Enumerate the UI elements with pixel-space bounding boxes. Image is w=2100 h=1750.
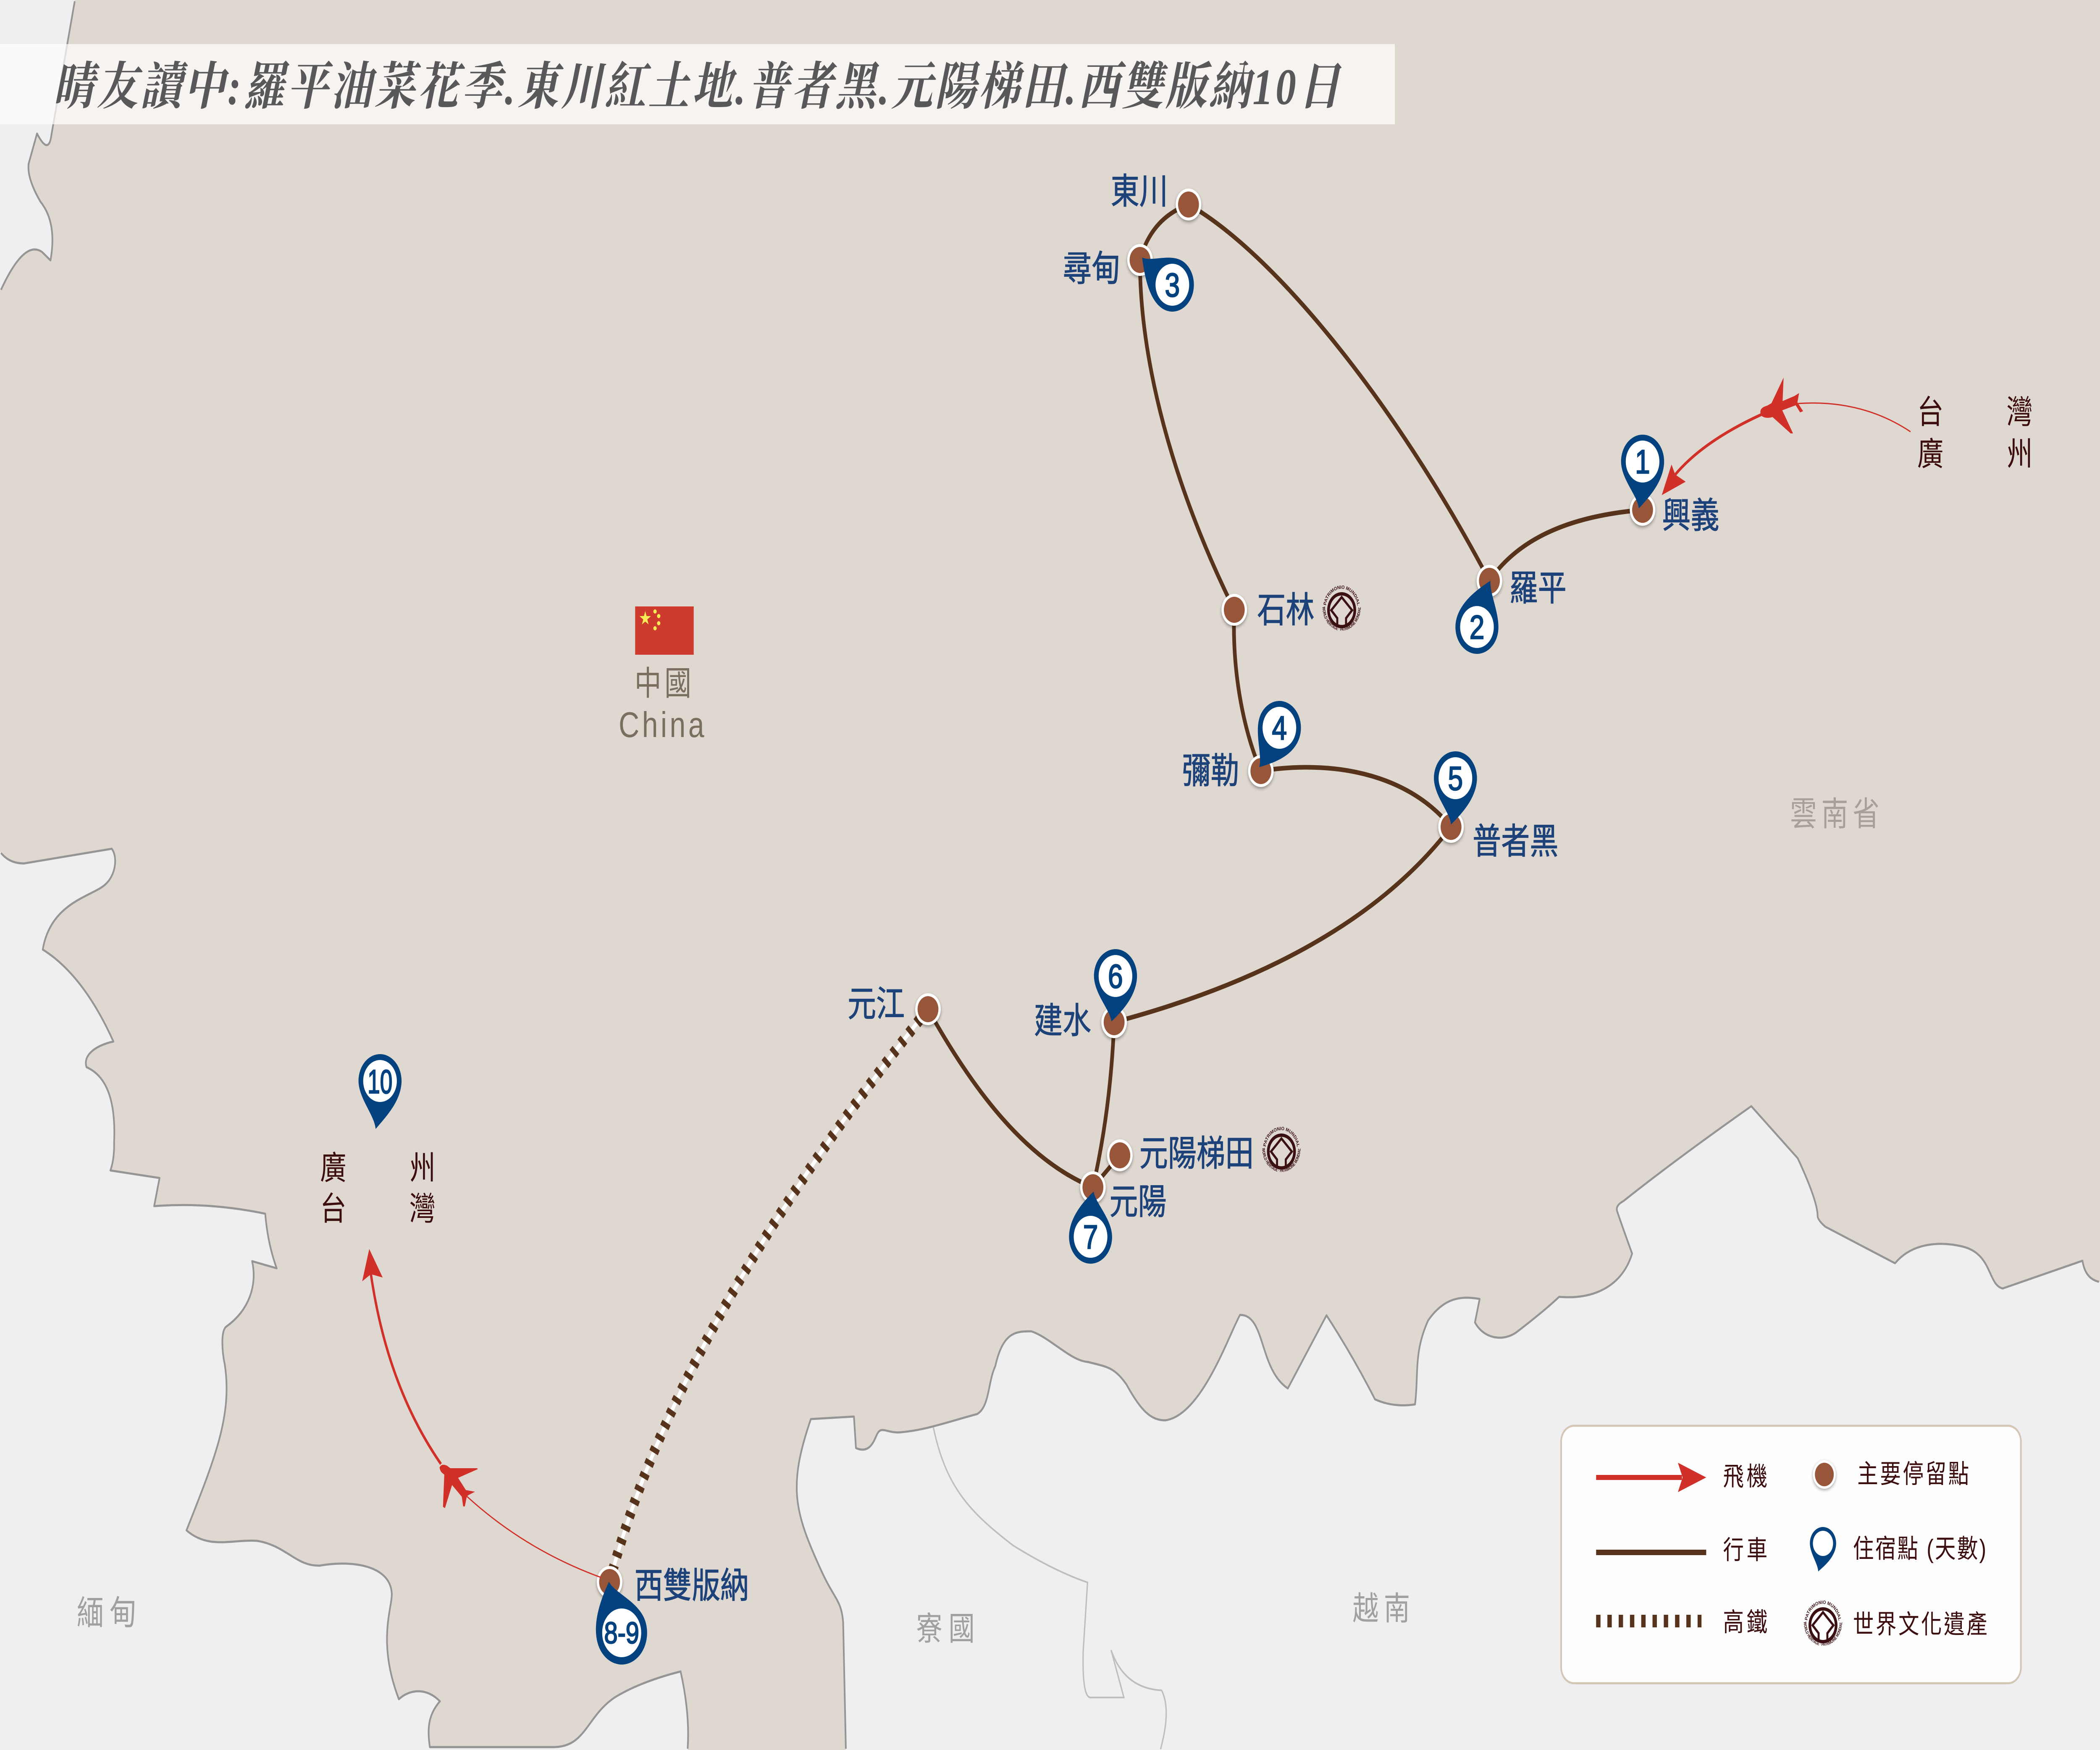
arrowhead — [1662, 464, 1685, 495]
icon: airplane — [1760, 378, 1803, 433]
legend label: main stop: 主要停留點 — [1857, 1459, 1971, 1488]
stop: Dongchuan — [1176, 189, 1201, 222]
stop: Yuanyang terraces — [1107, 1139, 1133, 1173]
gateway labels right — [1917, 394, 2033, 472]
icon: world heritage, Shilin: · PATRIMONIO MUNDIAL · — [1323, 585, 1360, 609]
pin: day 4: 4 — [1272, 709, 1287, 747]
label: Dongchuan: 東川 — [1111, 172, 1168, 212]
legend label: flight: 飛機 — [1723, 1462, 1770, 1491]
label: Jianshui: 建水 — [1034, 1001, 1091, 1041]
flag of China — [635, 606, 694, 655]
pin: day 10: 10 — [368, 1063, 392, 1101]
flight route out: Xishuangbanna to Guangzhou — [362, 1249, 601, 1577]
label: China in English: China — [619, 705, 707, 745]
pin: day 8-9 — [585, 1572, 654, 1673]
pin: day 6 — [1090, 946, 1139, 1024]
stop: Yuanyang — [1080, 1171, 1106, 1205]
pin: day 3: 3 — [1165, 266, 1180, 304]
stop: Yuanjiang — [915, 993, 941, 1027]
high-speed rail route — [609, 1009, 928, 1582]
label: Guangzhou: 廣州 — [320, 1149, 436, 1186]
pin: day 2: 2 — [1470, 609, 1484, 646]
stop labels — [635, 172, 1719, 1606]
icon: world heritage, Shilin: WORLD HERITAGE · PATRIMOINE MONDIAL — [1321, 606, 1362, 632]
icon: world heritage, Yuanyang terraces — [1261, 1126, 1302, 1173]
label: Xundian: 尋甸 — [1063, 249, 1120, 289]
arrowhead — [362, 1249, 383, 1281]
label: Xingyi: 興義 — [1662, 496, 1719, 536]
legend icon: world heritage: WORLD HERITAGE · PATRIMOINE MONDIAL — [1803, 1621, 1843, 1647]
pin: day 5: 5 — [1448, 760, 1463, 798]
legend icon: world heritage: · PATRIMONIO MUNDIAL · — [1804, 1600, 1842, 1624]
stop markers — [597, 189, 1655, 1600]
overnight pins — [354, 236, 1666, 1673]
legend: flight arrow — [1596, 1463, 1706, 1492]
flight path thick section — [371, 1274, 441, 1464]
label: Yuanjiang: 元江 — [848, 984, 905, 1024]
country label: Myanmar: 緬甸 — [77, 1594, 142, 1632]
label: Taiwan: 台灣 — [320, 1190, 436, 1227]
title: 晴友讀中:羅平油菜花季.東川紅土地.普者黑.元陽梯田.西雙版納10日 — [53, 58, 1341, 115]
flight route in: Taiwan to Guangzhou to Xingyi — [1662, 378, 1911, 495]
pin: day 7: 7 — [1083, 1218, 1098, 1256]
pin: day 5 — [1430, 748, 1479, 828]
legend label: drive: 行車 — [1723, 1535, 1770, 1564]
stop: Jianshui — [1101, 1006, 1127, 1040]
legend: drive line — [1596, 1550, 1706, 1555]
pin: day 10 — [354, 1051, 404, 1132]
icon: world heritage, Yuanyang terraces: · PATRIMONIO MUNDIAL · — [1263, 1126, 1300, 1150]
label: Shilin: 石林 — [1257, 590, 1315, 630]
pin: day 7 — [1067, 1189, 1115, 1266]
stop: Luoping — [1477, 565, 1502, 598]
gateway labels left — [320, 1149, 436, 1227]
pin: day 1: 1 — [1635, 443, 1650, 481]
legend: overnight pin — [1805, 1524, 1839, 1575]
label: Mile: 彌勒 — [1182, 751, 1239, 791]
icon: airplane — [440, 1465, 478, 1508]
icon: world heritage, Shilin — [1321, 585, 1362, 632]
label: Yuanyang: 元陽 — [1109, 1182, 1167, 1222]
label: China in Chinese: 中國 — [635, 665, 694, 703]
legend: stop marker — [1813, 1460, 1836, 1490]
stop: Xundian — [1127, 244, 1153, 278]
country label: Laos: 寮國 — [916, 1610, 981, 1647]
stop: Shilin — [1221, 594, 1247, 627]
label: Yuanyang terraces: 元陽梯田 — [1139, 1134, 1254, 1174]
legend label: overnight: 住宿點 (天數) — [1853, 1534, 1986, 1563]
driving routes — [928, 205, 1643, 1187]
label: Guangzhou: 廣州 — [1917, 436, 2033, 472]
flight path thin section — [1797, 403, 1911, 432]
icon: world heritage, Yuanyang terraces: WORLD HERITAGE · PATRIMOINE MONDIAL — [1261, 1148, 1302, 1173]
country label: Vietnam: 越南 — [1352, 1590, 1415, 1627]
pin: day 3 — [1129, 236, 1202, 322]
stop: Xishuangbanna — [597, 1566, 622, 1600]
panel: legend — [1561, 1426, 2021, 1683]
legend box — [1561, 1426, 2021, 1683]
legend: rail line — [1596, 1615, 1701, 1627]
label: Xishuangbanna: 西雙版納 — [635, 1566, 749, 1606]
legend label: rail: 高鐵 — [1723, 1608, 1770, 1637]
title band — [0, 44, 1395, 124]
China flag and label — [619, 606, 707, 745]
stop: Mile — [1248, 755, 1274, 789]
legend icon: world heritage — [1803, 1600, 1843, 1647]
flight path thick section — [1675, 414, 1762, 475]
province label: Yunnan: 雲南省 — [1790, 795, 1884, 833]
pin: day 4 — [1241, 691, 1309, 782]
legend label: world heritage: 世界文化遺產 — [1853, 1610, 1989, 1639]
pin: day 1 — [1617, 432, 1666, 511]
stop: Xingyi — [1630, 494, 1655, 527]
pin: day 6: 6 — [1108, 958, 1123, 995]
pin: day 8-9: 8-9 — [604, 1616, 639, 1650]
pin: day 2 — [1449, 572, 1511, 661]
flight path thin section — [467, 1496, 601, 1577]
label: Taiwan: 台灣 — [1917, 394, 2033, 430]
map: Laos and Vietnam border — [933, 1427, 1166, 1749]
label: Puzhehei: 普者黑 — [1473, 822, 1559, 862]
stop: Puzhehei — [1438, 811, 1464, 845]
label: Luoping: 羅平 — [1509, 569, 1567, 609]
